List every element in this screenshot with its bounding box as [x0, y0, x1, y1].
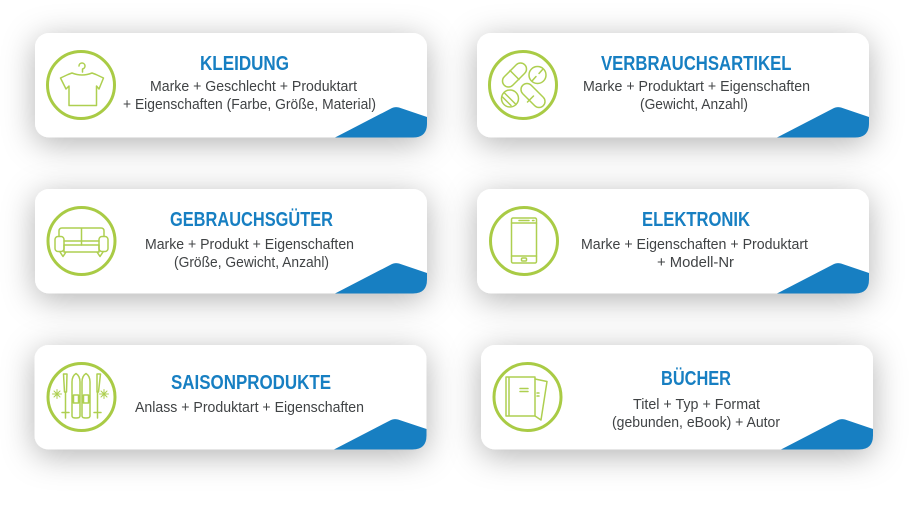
text: Bücher line 1: Titel + Typ + Format [633, 397, 760, 413]
heading: Bücher: BÜCHER [661, 367, 731, 390]
text: Bücher line 2: (gebunden, eBook) + Autor [612, 415, 780, 431]
text: Saisonprodukte line 1: Anlass + Produktart + Eigenschaften [135, 400, 364, 416]
text: Verbrauchsartikel line 1: Marke + Produktart + Eigenschaften [583, 79, 810, 95]
icon: sofa [48, 208, 115, 274]
corner accent: Bücher [781, 419, 873, 450]
text: Gebrauchsgüter line 2: (Größe, Gewicht, Anzahl) [174, 255, 329, 271]
heading: Saisonprodukte: SAISONPRODUKTE [171, 372, 331, 394]
panel: Saisonprodukte [34, 345, 426, 450]
text: Elektronik line 1: Marke + Eigenschaften + Produktart [581, 237, 808, 253]
corner accent: Verbrauchsartikel [777, 107, 869, 138]
panel: Bücher [481, 345, 873, 450]
corner accent: Elektronik [777, 263, 869, 294]
corner accent: Gebrauchsgüter [335, 263, 427, 294]
icon: skis and poles [48, 364, 115, 430]
icon: pills [490, 52, 556, 118]
text: Gebrauchsgüter line 1: Marke + Produkt + Eigenschaften [145, 237, 354, 253]
heading: Elektronik: ELEKTRONIK [642, 209, 750, 231]
heading: Gebrauchsgüter: GEBRAUCHSGÜTER [170, 208, 333, 231]
heading: Verbrauchsartikel: VERBRAUCHSARTIKEL [601, 53, 792, 75]
text: Verbrauchsartikel line 2: (Gewicht, Anzahl) [640, 97, 748, 113]
panel: Verbrauchsartikel [477, 33, 869, 138]
text: Kleidung line 1: Marke + Geschlecht + Produktart [150, 79, 357, 95]
panel: Gebrauchsgüter [35, 189, 427, 294]
icon: books [494, 364, 561, 430]
text: Elektronik line 2: + Modell-Nr [657, 255, 734, 271]
corner accent: Saisonprodukte [334, 419, 426, 450]
corner accent: Kleidung [335, 107, 427, 138]
panel: Kleidung [35, 33, 427, 138]
icon: smartphone [490, 208, 558, 274]
panel: Elektronik [477, 189, 869, 294]
heading: Kleidung: KLEIDUNG [200, 53, 289, 75]
text: Kleidung line 2: + Eigenschaften (Farbe, Größe, Material) [123, 97, 376, 113]
icon: t-shirt on hanger [48, 52, 114, 118]
